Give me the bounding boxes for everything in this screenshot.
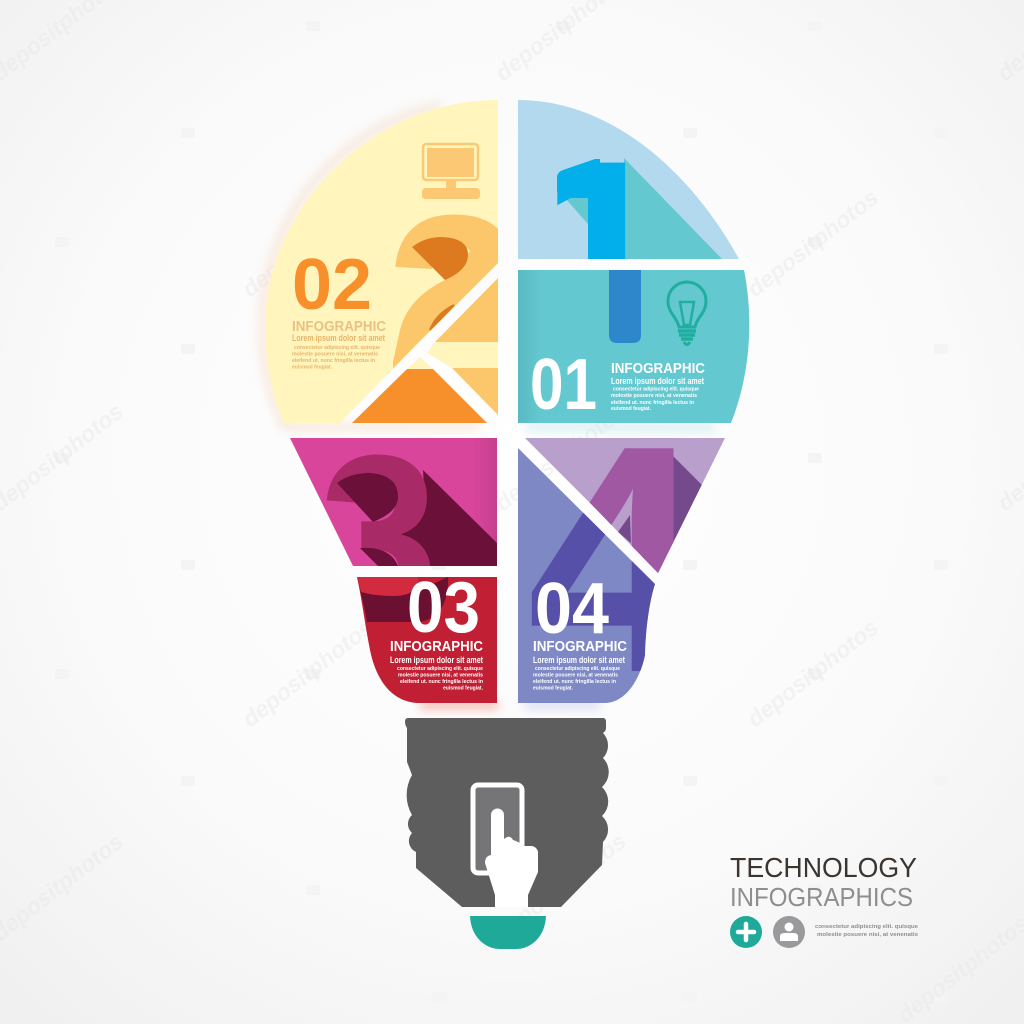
panel: 04 periwinkle [518,448,655,703]
folded pieces of numeral 2 [352,278,498,423]
icon: pointing hand [485,809,538,907]
heading: infographic 04: INFOGRAPHIC [533,639,627,655]
watermark: depositphotos [237,614,378,732]
numeral 3 with long shadow: 3 [321,409,437,664]
text block: 04 [533,655,626,692]
panel: 02 yellow quadrant [265,100,498,423]
numeral 2 with long shadow: 2 [387,164,523,446]
icon: computer monitor [422,144,480,199]
text block: 01: euismod feugiat. [611,406,651,412]
text block: 02: consectetur adipiscing elit. quisque [294,345,380,351]
text block: 04: euismod feugiat. [533,686,573,692]
heading: infographic 03: INFOGRAPHIC [390,639,483,655]
text block: 01: Lorem ipsum dolor sit amet [611,376,705,387]
panel: 01 blue top [518,100,739,259]
icon: light bulb [668,282,706,344]
numeral 1 with long shadow: 1 [542,121,667,338]
bulb tip [470,916,546,949]
text block: 04: consectetur adipiscing elit. quisque [535,666,620,672]
text block: 02: eleifend ut. nunc fringilla lectus in [292,358,375,364]
text block: 04: Lorem ipsum dolor sit amet [533,655,626,666]
text block: 01: molestie posuere nisi, at venenatis [611,393,697,399]
number 03: 03 [407,568,480,648]
text block: 01: consectetur adipiscing elit. quisque [613,386,699,392]
numeral 3 with long shadow [326,454,497,566]
numeral 2 with long shadow [393,214,498,368]
title [730,852,917,912]
soft panel shadows [262,106,715,709]
watermark: depositphotos [490,398,631,516]
text block: 03: eleifend ut. nunc fringilla lectus in [400,679,483,685]
caption: consectetur adipiscing elit. quisque [815,924,918,930]
caption [815,924,918,938]
icon: person [773,916,805,948]
watermark: depositphotos [237,184,378,302]
title: INFOGRAPHICS [730,882,913,912]
heading: infographic 01: INFOGRAPHIC [611,361,705,377]
panel: 04 purple triangle [525,438,725,573]
numeral 1 with long shadow [557,158,722,259]
numeral 4 lower: 4 [527,379,707,740]
text block: 03 [390,655,484,692]
numeral 3 lower part [358,577,448,622]
number 02: 02 [292,245,372,325]
numeral 1 stem [609,270,641,343]
numeral 4 upper with shadow [590,448,702,573]
title: TECHNOLOGY [730,852,917,883]
text block: 01 [611,376,705,412]
caption: molestie posuere nisi, at venenatis [817,932,918,938]
text block: 02: Lorem ipsum dolor sit amet [292,333,386,344]
icon: plus [730,916,762,948]
text block: 02: molestie posuere nisi, at venenatis [292,352,378,358]
panel: 01 teal lower [518,270,749,425]
text block: 04: molestie posuere nisi, at venenatis [533,672,618,678]
text block: 03: consectetur adipiscing elit. quisque [397,666,483,672]
heading: infographic 02: INFOGRAPHIC [292,319,386,335]
panel: 03 magenta [290,438,497,566]
numeral 4 upper with shadow: 4 [527,379,707,740]
text block: 04: eleifend ut. nunc fringilla lectus in [533,679,616,685]
number 01: 01 [530,345,597,425]
text block: 02 [292,333,386,370]
watermark: depositphotos [742,614,883,732]
text block: 03: molestie posuere nisi, at venenatis [398,672,483,678]
number 04: 04 [535,569,609,649]
text block: 03: euismod feugiat. [443,686,483,692]
text block: 03: Lorem ipsum dolor sit amet [390,655,484,666]
icon: smartphone [473,785,522,873]
panel: 03 red [357,568,497,703]
watermark: depositphotos [742,184,883,302]
bulb screw base [405,718,609,907]
watermark: depositphotos [490,828,631,946]
text block: 01: eleifend ut. nunc fringilla lectus in [611,400,694,406]
text block: 02: euismod feugiat. [292,364,332,370]
